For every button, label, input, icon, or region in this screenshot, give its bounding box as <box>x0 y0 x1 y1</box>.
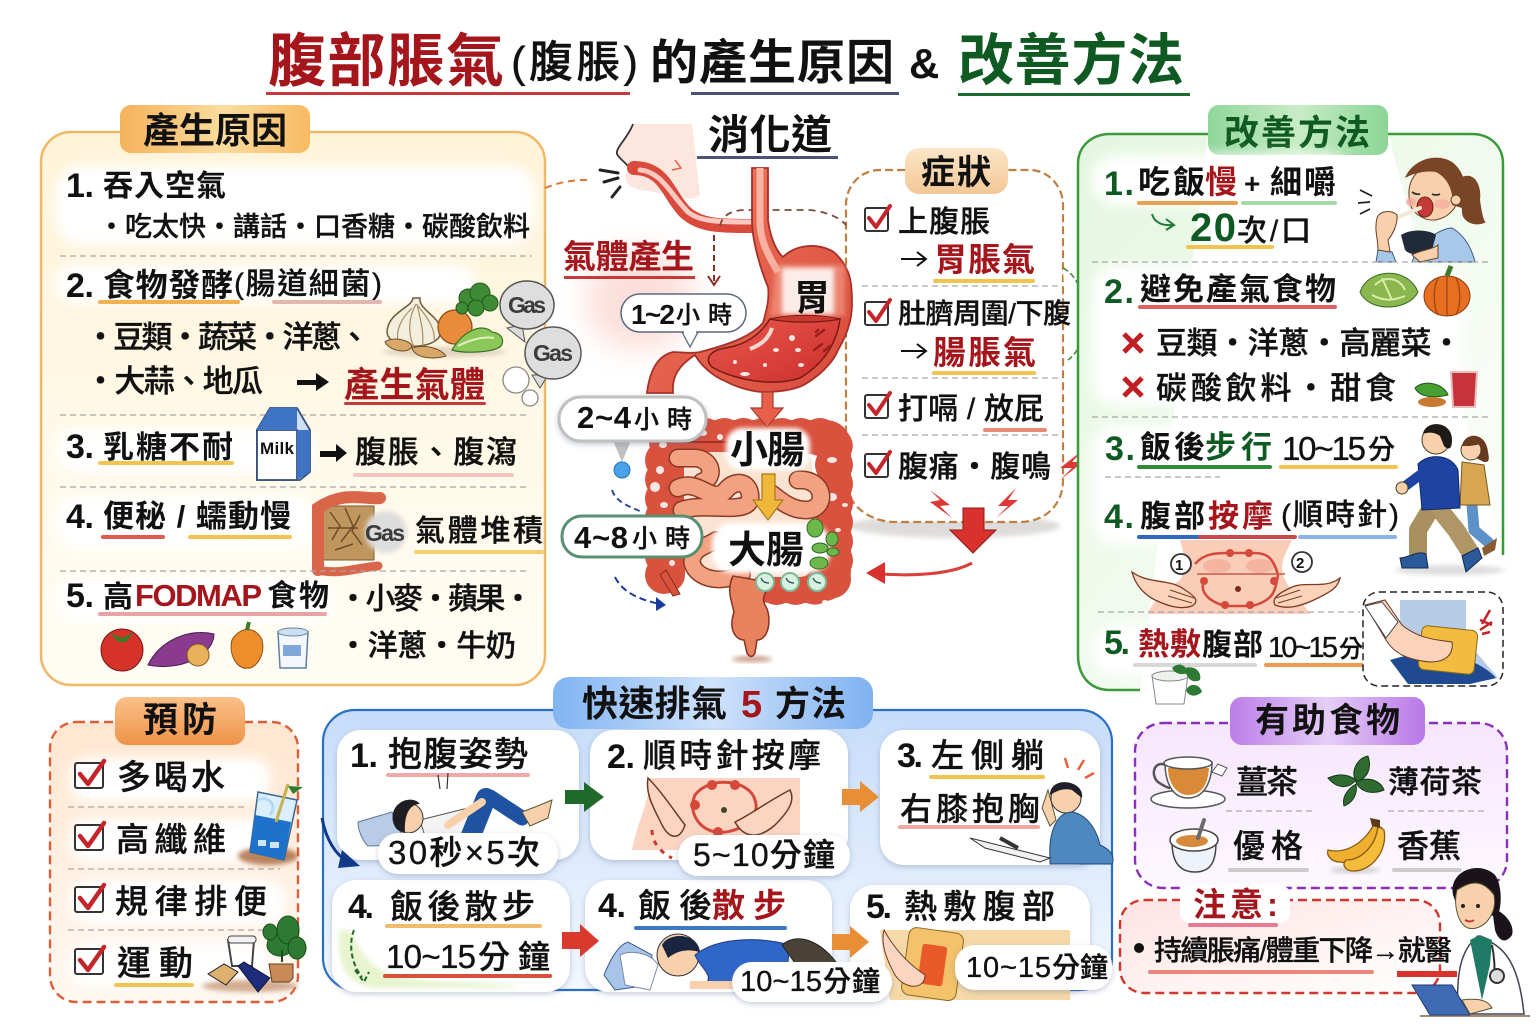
method 1: 次/口 <box>1237 215 1311 248</box>
food: ginger tea: 薑茶 <box>1236 764 1298 800</box>
arrow: symptoms to colon <box>866 508 996 584</box>
method 5: 5. <box>1104 624 1130 662</box>
method 5: 熱敷 <box>1138 627 1201 662</box>
method 4: 腹部 <box>1140 499 1205 534</box>
pill: 5-10 min: 5~10分鐘 <box>693 837 835 873</box>
card 3: 左側躺 <box>931 737 1044 774</box>
small intestine <box>678 452 821 579</box>
title: 的產生原因 <box>650 37 894 90</box>
panel: prevention <box>50 697 306 1002</box>
cause 3: 3. <box>66 428 94 466</box>
method 4: 按摩 <box>1208 499 1273 534</box>
card 4 <box>332 880 570 992</box>
icon: constipated colon <box>316 497 407 572</box>
card 4: 10~15 <box>386 938 476 975</box>
cause 3 <box>66 428 517 475</box>
panel: caution <box>1120 885 1457 993</box>
food: ginger tea <box>1151 757 1298 808</box>
title: 腹部脹氣 <box>268 29 504 94</box>
pill: heat time: 10~15 <box>966 952 1051 984</box>
method 5: 分 <box>1339 636 1363 663</box>
icon: milk carton: Milk <box>260 439 295 458</box>
card 6 <box>850 885 1090 1002</box>
method 2: 豆類・洋蔥・高麗菜・ <box>1156 326 1462 361</box>
method 1: 吃飯 <box>1138 164 1205 200</box>
cause 4: 4. <box>66 498 94 536</box>
card 2: 2. <box>607 738 635 776</box>
pill: sleep time: 10~15 <box>740 966 822 998</box>
food: banana: 香蕉 <box>1397 828 1461 864</box>
cause 2 <box>66 267 486 405</box>
symptom 1: 胃脹氣 <box>934 241 1035 278</box>
symptom 2: 肚臍周圍/下腹 <box>898 298 1071 329</box>
cause 5: 5. <box>66 577 94 615</box>
caution text: 持續脹痛/體重下降→就醫 <box>1154 935 1452 966</box>
method 2 <box>1104 272 1462 406</box>
heading: caution: 注意: <box>1193 886 1278 923</box>
title <box>266 29 1190 96</box>
method 3: 10~15 <box>1282 430 1366 467</box>
cause 2: (腸道細菌) <box>234 268 382 301</box>
cause 5: 食物 <box>267 580 329 613</box>
card 1 <box>337 730 579 860</box>
panel: symptoms <box>846 148 1085 584</box>
method 5: 腹部 <box>1202 629 1263 662</box>
arrow: red <box>562 924 599 957</box>
symptom 1 <box>865 206 1035 281</box>
cause 5: ・洋蔥・牛奶 <box>338 630 516 663</box>
time bubble 4-8h: 小時 <box>632 525 690 553</box>
pill: sleep time: 分鐘 <box>823 966 880 997</box>
heading: digestive tract: 消化道 <box>708 112 832 158</box>
method 5 <box>1104 624 1364 665</box>
symptom 3: 打嗝 / 放屁 <box>898 393 1044 426</box>
cause 1 <box>66 167 530 242</box>
card 5 <box>585 880 838 992</box>
connector: air to mouth <box>545 180 587 188</box>
icon: gas bubbles: Gas <box>533 340 573 366</box>
label: large intestine <box>712 523 830 573</box>
icon: knees to chest <box>358 773 552 846</box>
heading: prevention <box>115 697 245 745</box>
method 1: 20 <box>1190 206 1236 250</box>
method 4: 4. <box>1104 498 1134 536</box>
card 2: 順時針按摩 <box>643 737 821 774</box>
cause 3: 腹脹、腹瀉 <box>355 435 517 470</box>
cause 5: FODMAP <box>135 578 262 613</box>
cause 2: ・大蒜、地瓜 <box>85 364 263 399</box>
connector: symptoms dashed <box>720 210 846 226</box>
icon: cup with leaves <box>1152 665 1202 704</box>
card 3: 右膝抱胸 <box>900 791 1040 827</box>
icon: heat pack <box>1363 592 1503 686</box>
cause 2: 2. <box>66 267 94 305</box>
cause 5 <box>66 577 533 663</box>
item: water: 多喝水 <box>117 759 225 797</box>
icon: gas bubbles <box>500 281 581 406</box>
food: yogurt <box>1170 820 1307 872</box>
food: mint tea: 薄荷茶 <box>1388 765 1482 800</box>
card 5: 4. <box>598 887 626 925</box>
card 1: 抱腹姿勢 <box>388 736 528 774</box>
heading: improvement <box>1208 105 1388 155</box>
method 3 <box>1105 430 1396 468</box>
heading: helpful foods <box>1230 697 1425 745</box>
card 4: 飯後散步 <box>390 888 535 925</box>
card 6: 5. <box>866 888 892 926</box>
label: large intestine: 大腸 <box>728 530 804 572</box>
heading: prevention: 預防 <box>143 701 217 740</box>
method 4: (順時針) <box>1281 499 1399 532</box>
card 3: 3. <box>897 737 923 775</box>
heading: quick relief: 方法 <box>775 685 846 724</box>
heading: symptoms <box>905 148 1008 194</box>
method 2: 碳酸飲料・甜食 <box>1156 371 1396 406</box>
icon: gut flora <box>756 519 839 591</box>
method 3: 步行 <box>1205 430 1272 465</box>
symptom 4: 腹痛・腹鳴 <box>898 451 1051 484</box>
pill: 30 sec: 30秒×5次 <box>388 834 540 871</box>
icon: sleeping person <box>604 934 838 990</box>
method 1: 細嚼 <box>1270 164 1336 200</box>
arrow: orange 1 <box>842 781 879 812</box>
icon: abdominal massage: 1 <box>1175 557 1183 574</box>
icon: worried man <box>970 758 1113 864</box>
icons: fodmap foods <box>101 622 308 671</box>
cause 1: 吞入空氣 <box>103 170 226 203</box>
time bubble 4-8h <box>562 516 702 611</box>
rectum <box>730 576 772 662</box>
method 4 <box>1104 498 1399 537</box>
card 2 <box>590 730 848 860</box>
arrow: orange 2 <box>832 926 869 958</box>
cause 5: 高 <box>103 581 133 614</box>
face <box>600 124 700 199</box>
pill: heat time: 分鐘 <box>1052 952 1108 983</box>
label: small intestine: 小腸 <box>730 430 805 472</box>
icons: gas foods <box>1360 266 1477 407</box>
method 1: + <box>1244 168 1260 199</box>
label: gas production: 氣體產生 <box>563 238 694 275</box>
method 3: 分 <box>1368 435 1395 465</box>
symptom 1: 上腹脹 <box>898 206 990 239</box>
curved navy arrow <box>322 818 360 868</box>
cause 5: ・小麥・蘋果・ <box>338 583 533 616</box>
heading: improvement: 改善方法 <box>1224 114 1370 153</box>
pill: sleep time <box>732 962 892 1002</box>
item: exercise <box>75 945 193 985</box>
icon: woman eating <box>1358 158 1486 262</box>
heading: quick relief <box>553 677 873 729</box>
card 3 <box>880 730 1113 865</box>
stomach: 胃 <box>794 277 830 318</box>
method 2: 避免產氣食物 <box>1140 272 1336 307</box>
time bubble 1-2h <box>621 294 746 347</box>
panel: causes <box>41 105 581 685</box>
time bubble 1-2h: 小時 <box>676 302 732 329</box>
card 6: 熱敷腹部 <box>904 888 1055 925</box>
time bubble 4-8h: 4~8 <box>574 520 628 555</box>
card 4: 4. <box>348 888 374 926</box>
card 5: 飯後 <box>638 887 712 924</box>
cause 4: 氣體堆積 <box>415 515 543 548</box>
cause 4 <box>66 498 543 552</box>
arrow: stomach to small intestine <box>751 392 783 427</box>
card 5: 散步 <box>712 887 786 924</box>
pharynx <box>634 168 752 226</box>
icon: abdominal massage: 2 <box>1296 555 1304 572</box>
panel: helpful foods <box>1135 697 1507 888</box>
stomach <box>647 168 852 393</box>
large intestine <box>650 430 848 604</box>
method 3: 3. <box>1105 430 1135 468</box>
time bubble 2-4h: 2~4 <box>577 400 632 435</box>
heading: quick relief: 5 <box>741 684 762 726</box>
cause 1: ・吃太快・講話・口香糖・碳酸飲料 <box>98 212 530 242</box>
icon: water glass <box>238 784 303 865</box>
arrow: green <box>565 782 604 812</box>
pill: heat time <box>955 945 1112 990</box>
panel: improvement <box>1078 105 1505 704</box>
caution text <box>1134 935 1457 977</box>
time bubble 2-4h: 小時 <box>634 406 692 434</box>
heading: causes <box>120 105 310 153</box>
card 1: 1. <box>350 737 378 775</box>
icon: milk carton <box>257 408 310 480</box>
item: fiber: 高纖維 <box>116 821 226 858</box>
icon: heat pack on belly <box>880 927 1070 1002</box>
heading: quick relief: 快速排氣 <box>582 683 727 724</box>
arrow: gas dashed <box>708 235 720 285</box>
panel: quick relief <box>322 677 1113 1002</box>
cause 4: 便秘 / 蠕動慢 <box>103 499 291 534</box>
heading: symptoms: 症狀 <box>921 154 991 192</box>
method 1: 1. <box>1104 165 1134 203</box>
icons: pain bolts <box>930 450 1083 518</box>
item: regular bowel: 規律排便 <box>115 883 267 920</box>
method 2: 2. <box>1104 273 1134 311</box>
method 3: 飯後 <box>1140 430 1205 465</box>
cause 2: 產生氣體 <box>344 366 485 405</box>
icon: constipated colon: Gas <box>365 520 405 546</box>
icon: abdominal massage <box>1132 540 1340 614</box>
cause 2: 食物發酵 <box>103 267 233 303</box>
cause 2: ・豆類・蔬菜・洋蔥、 <box>85 320 370 355</box>
icon: vegetables <box>383 283 507 358</box>
icon: exercise gear and plant <box>202 916 306 992</box>
food: mint tea <box>1328 756 1482 806</box>
title: (腹脹) <box>511 38 638 87</box>
symptom 2 <box>865 298 1071 373</box>
method 1 <box>1104 164 1336 250</box>
cause 3: 乳糖不耐 <box>103 430 233 465</box>
digestive tract <box>559 112 852 662</box>
title: & <box>909 40 939 87</box>
icon: gas bubbles: Gas <box>508 292 546 318</box>
item: exercise: 運動 <box>117 945 193 983</box>
time bubble 1-2h: 1~2 <box>631 299 675 330</box>
arrow: small to large intestine <box>753 474 783 520</box>
method 5: 10~15 <box>1268 632 1338 664</box>
heading: causes: 產生原因 <box>143 110 287 151</box>
symptom 2: 腸脹氣 <box>933 334 1036 371</box>
time bubble 2-4h <box>559 397 706 512</box>
icon: walking couple <box>1395 424 1505 575</box>
food: banana <box>1328 818 1461 873</box>
heading: helpful foods: 有助食物 <box>1255 702 1400 740</box>
icon: belly massage <box>632 778 800 858</box>
cause 1: 1. <box>66 167 94 205</box>
food: yogurt: 優格 <box>1233 828 1303 864</box>
title: 改善方法 <box>958 29 1184 92</box>
icon: doctor <box>1412 868 1530 1016</box>
method 1: 慢 <box>1205 164 1237 200</box>
card 4: 分鐘 <box>478 939 550 975</box>
